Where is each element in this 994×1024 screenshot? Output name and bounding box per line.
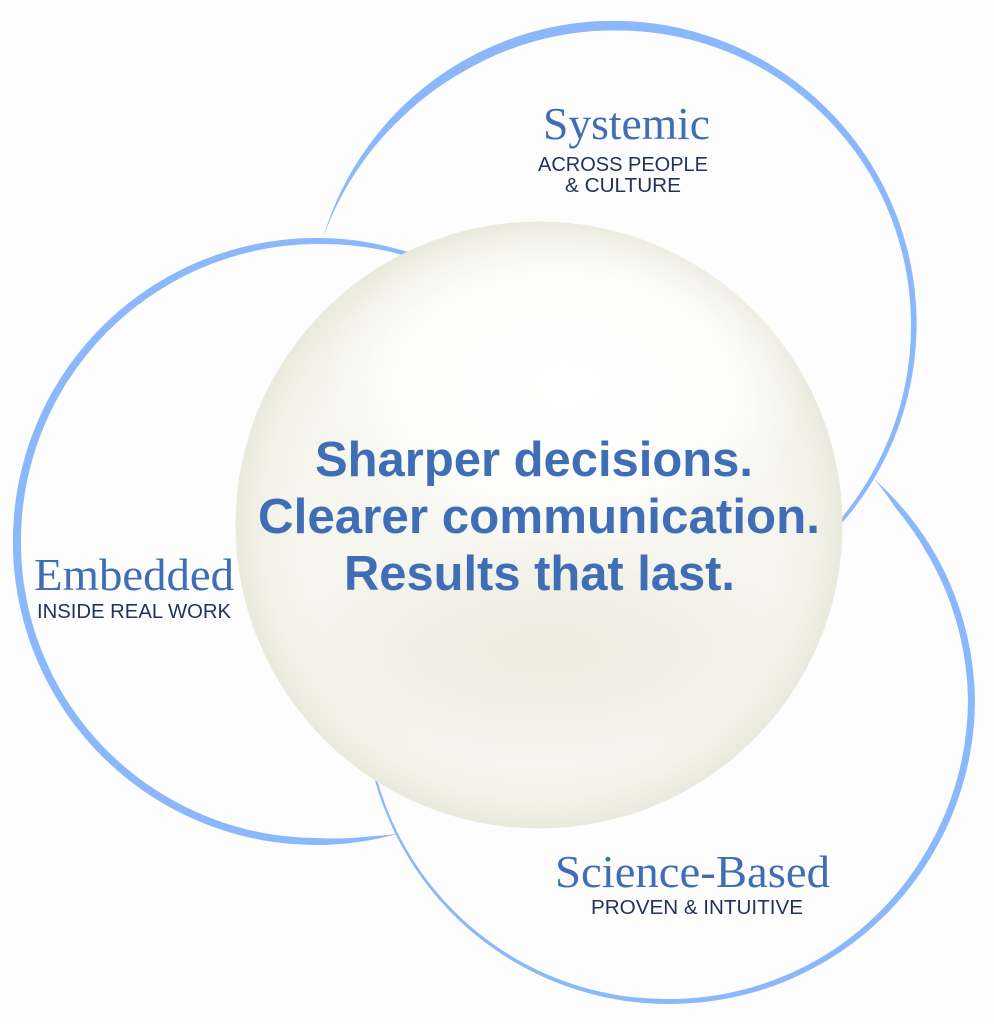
label: Science-Based: PROVEN & INTUITIVE xyxy=(591,897,803,919)
label: Systemic: Systemic xyxy=(543,98,710,149)
central message xyxy=(258,433,820,601)
label: Systemic: & CULTURE xyxy=(565,175,681,197)
ring: left circle outline xyxy=(13,238,420,845)
pearl: central sphere xyxy=(236,222,842,828)
ring: top circle outline xyxy=(323,21,917,535)
label: Science-Based xyxy=(555,846,830,919)
central message: Results that last. xyxy=(344,547,735,601)
label: Science-Based: Science-Based xyxy=(555,846,830,897)
central message: Sharper decisions. xyxy=(315,433,753,487)
ring: bottom circle outline xyxy=(370,479,975,1004)
label: Systemic xyxy=(538,98,710,197)
label: Embedded: INSIDE REAL WORK xyxy=(37,601,232,623)
label: Embedded: Embedded xyxy=(34,549,234,600)
label: Embedded xyxy=(34,549,234,623)
label: Systemic: ACROSS PEOPLE xyxy=(538,154,708,176)
central message: Clearer communication. xyxy=(258,490,820,544)
